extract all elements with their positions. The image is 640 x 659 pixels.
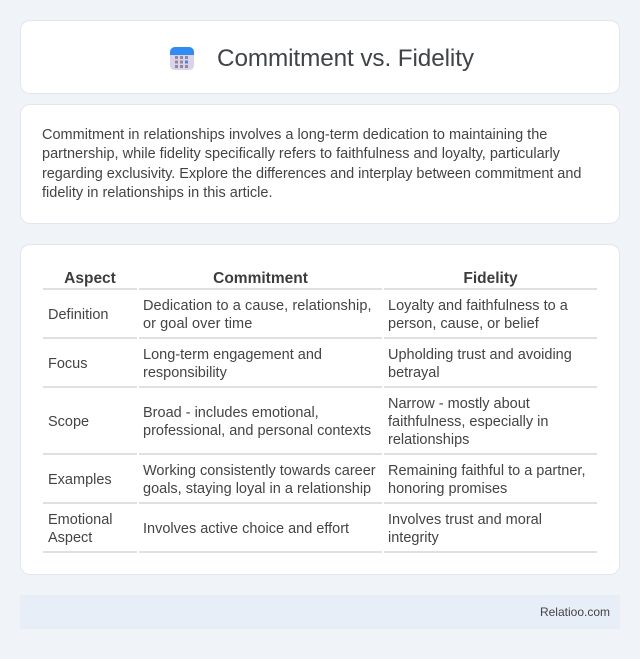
row: Emotional Aspect [48, 512, 542, 546]
panel: title card [20, 20, 620, 94]
row: Definition: Dedication to a cause, relationship, [143, 298, 372, 314]
row: Definition [48, 298, 568, 332]
panel: introduction [20, 104, 620, 224]
row: Examples: Examples [48, 472, 112, 488]
row: Scope [48, 396, 548, 448]
row: Focus: Upholding trust and avoiding [388, 347, 572, 363]
text block: introduction [42, 127, 581, 201]
text block: introduction: fidelity in relationships in this article. [42, 185, 272, 201]
icon: calendar [170, 47, 194, 70]
row: Examples: honoring promises [388, 481, 507, 497]
comparison table [43, 270, 597, 553]
row: Examples: Working consistently towards career [143, 463, 376, 479]
row: Emotional Aspect: Emotional [48, 512, 112, 528]
row: Emotional Aspect: Aspect [48, 530, 92, 546]
row: Scope: faithfulness, especially in [388, 414, 548, 430]
row: Definition: Definition [48, 307, 108, 323]
header: Commitment: Commitment [213, 270, 308, 286]
row: Focus [48, 347, 572, 381]
row: Scope: Narrow - mostly about [388, 396, 530, 412]
row: Examples: Remaining faithful to a partner, [388, 463, 585, 479]
row: Focus: Long-term engagement and [143, 347, 322, 363]
row: Scope: relationships [388, 432, 469, 448]
row: Focus: betrayal [388, 365, 440, 381]
row: Emotional Aspect: Involves active choice and effort [143, 521, 349, 537]
panel: comparison table [20, 244, 620, 575]
title: Commitment vs. Fidelity [217, 45, 474, 72]
header: Aspect: Aspect [64, 270, 116, 286]
row: Definition: Loyalty and faithfulness to a [388, 298, 568, 314]
row: Emotional Aspect: Involves trust and moral [388, 512, 542, 528]
row: Scope: professional, and personal contexts [143, 423, 371, 439]
row: Focus: responsibility [143, 365, 227, 381]
text block: introduction: Commitment in relationships involves a long-term dedication to maintaining the [42, 127, 547, 143]
text block: introduction: partnership, while fidelity specifically refers to faithfulness and loyalty, particularly [42, 146, 560, 162]
text block: introduction: regarding exclusivity. Explore the differences and interplay between commitment and [42, 166, 581, 182]
row: Definition: person, cause, or belief [388, 316, 539, 332]
row: Examples [48, 463, 585, 497]
row: Focus: Focus [48, 356, 88, 372]
header: Fidelity: Fidelity [463, 270, 518, 286]
row: Emotional Aspect: integrity [388, 530, 439, 546]
row: Examples: goals, staying loyal in a relationship [143, 481, 371, 497]
footer bar [20, 595, 620, 629]
row: Scope: Broad - includes emotional, [143, 405, 319, 421]
row: Scope: Scope [48, 414, 89, 430]
footer text: Relatioo.com [540, 605, 610, 619]
row: Definition: or goal over time [143, 316, 252, 332]
